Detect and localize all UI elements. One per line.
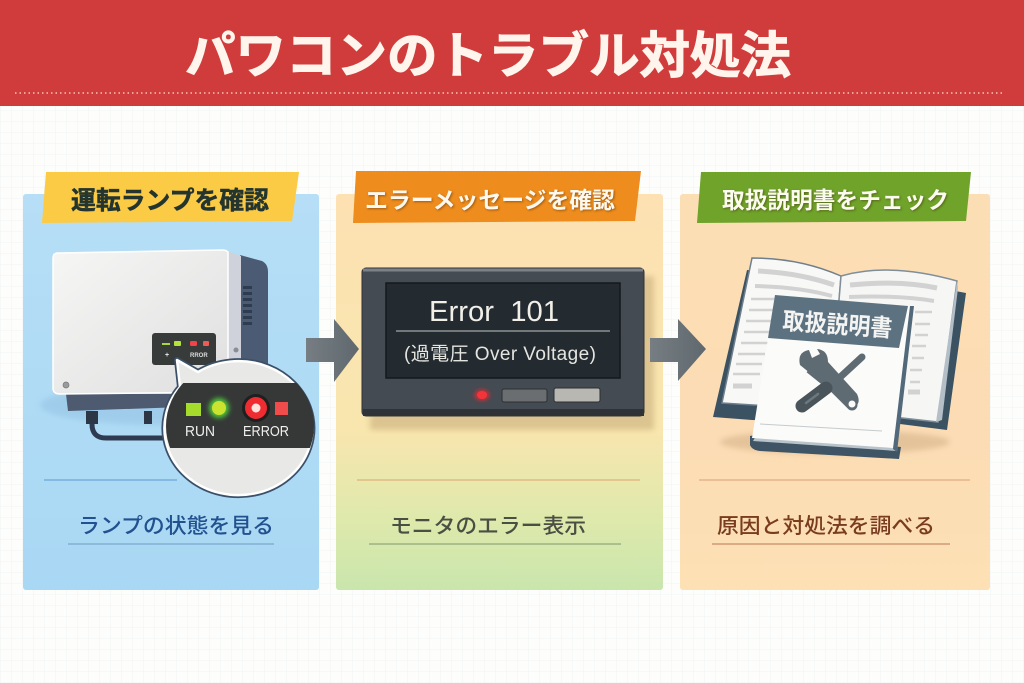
arrow: step 2 to step 3	[650, 319, 706, 381]
heading ribbon: 運転ランプを確認	[42, 172, 299, 223]
heading ribbon: 運転ランプを確認: 運転ランプを確認	[71, 181, 269, 217]
heading ribbon: 取扱説明書をチェック: 取扱説明書をチェック	[722, 181, 949, 215]
status panel	[152, 333, 216, 365]
side panel	[240, 255, 268, 392]
right page	[830, 270, 957, 422]
panel: check the manual	[680, 172, 990, 590]
illustration: power conditioner: RROR	[190, 353, 208, 359]
manual title: 取扱説明書	[782, 301, 894, 344]
illustration: monitor display	[362, 268, 654, 430]
arrow: step 1 to step 2	[306, 319, 359, 382]
caption: 原因と対処法を調べる	[717, 510, 935, 540]
manual cover back	[750, 432, 901, 459]
title: パワコンのトラブル対処法	[185, 16, 791, 88]
main case	[53, 250, 228, 394]
screen	[386, 283, 620, 378]
error code: Error 101	[429, 296, 559, 328]
manual	[752, 295, 912, 448]
heading ribbon: エラーメッセージを確認: エラーメッセージを確認	[365, 181, 615, 215]
illustration: power conditioner	[40, 250, 290, 438]
illustration: open book with manual	[713, 258, 966, 459]
callout magnifier: RUN and ERROR lamps: RUN	[185, 424, 215, 440]
callout magnifier: RUN and ERROR lamps	[160, 360, 320, 495]
page lines	[733, 271, 937, 392]
panel: check the run lamp	[23, 172, 320, 590]
manual header	[768, 295, 908, 348]
icon: wrench and screwdriver	[799, 349, 862, 408]
caption: ランプの状態を見る	[78, 510, 274, 540]
error description: (過電圧 Over Voltage)	[404, 343, 596, 365]
caption: モニタのエラー表示	[390, 510, 586, 540]
heading ribbon: 取扱説明書をチェック	[697, 172, 971, 223]
left page	[722, 258, 841, 410]
callout magnifier: RUN and ERROR lamps: ERROR	[243, 424, 289, 440]
heading ribbon: エラーメッセージを確認	[353, 171, 641, 223]
title banner	[0, 0, 1024, 106]
illustration: power conditioner: +	[165, 352, 169, 359]
book cover	[713, 270, 966, 430]
buttons	[502, 389, 547, 402]
base and cable	[66, 394, 240, 411]
indicator led	[475, 390, 489, 400]
panel: check the error message	[336, 171, 663, 590]
